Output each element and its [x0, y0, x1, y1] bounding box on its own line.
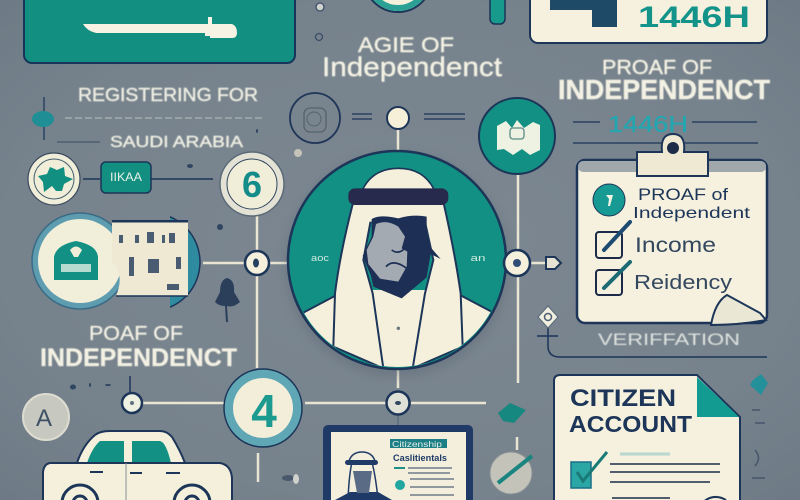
icon: teal circle: [593, 184, 625, 216]
icon: number four badge: [224, 369, 302, 447]
label: verification: VERIFFATION: [598, 330, 740, 349]
building: [112, 220, 188, 296]
node: [504, 250, 530, 276]
heading: registering for Saudi Arabia: SAUDI ARABIA: [110, 134, 243, 151]
icon: teal emblem circle: [479, 98, 555, 174]
icon: letter A badge: A: [36, 405, 52, 432]
side marks: [752, 410, 765, 478]
node: [387, 107, 409, 129]
checklist item: residency: Reidency: [634, 272, 732, 294]
face: [363, 216, 441, 298]
title: ACCOUNT: [569, 411, 692, 437]
icon: teal pin: [32, 97, 54, 140]
panel: top right date card: [530, 0, 767, 43]
node: [386, 392, 410, 414]
title: CITIZEN: [570, 385, 676, 412]
heading: poaf of independenct left: [40, 323, 237, 372]
icon: teal gem lower: [498, 403, 526, 423]
title: [569, 385, 692, 437]
clipboard title: [633, 185, 751, 222]
head top: [363, 168, 434, 189]
icon: number six badge: [220, 152, 284, 216]
icon: number six badge: 6: [242, 164, 262, 205]
node: [245, 251, 269, 275]
top circle: [364, 0, 432, 12]
teal house: [54, 241, 98, 280]
panel: clipboard checklist: [577, 134, 767, 325]
info lines: [394, 468, 454, 495]
icon: bell: [215, 278, 240, 322]
panel: flag: [24, 0, 295, 63]
small text marks: an: [470, 253, 486, 263]
icon: sword: [83, 17, 237, 38]
chest: [370, 290, 427, 373]
node: [546, 257, 561, 269]
heading: age of independence: Independenct: [322, 52, 503, 82]
heading: age of independence: [322, 34, 503, 82]
heading: proaf of independenct right: INDEPENDENCT: [558, 74, 770, 105]
icon: building and house badge: [32, 213, 200, 311]
panel: tablet profile: [323, 425, 473, 500]
shoulders: [303, 294, 492, 349]
teal label 1446H: 1446H: [608, 111, 688, 137]
teal pill: [490, 0, 505, 24]
clipboard title: PROAF of: [638, 185, 728, 204]
figure: [303, 168, 493, 373]
fold: [697, 377, 739, 417]
icon: letter A badge: [23, 394, 69, 440]
icon: star badge: [28, 153, 80, 205]
headband: [348, 188, 448, 205]
node: [122, 376, 142, 413]
icon: car: [43, 431, 232, 500]
icon: check circle: [490, 452, 532, 494]
header bar: [390, 439, 447, 449]
heading: proaf of independenct right: [558, 57, 770, 105]
small top nodes: [316, 3, 324, 40]
icon: diamond node: [538, 306, 558, 328]
checklist item: income: [596, 222, 716, 258]
connector lines: [57, 114, 767, 482]
heading: poaf of independenct left: POAF OF: [89, 323, 183, 345]
label: teal tag: IIKAA: [110, 170, 142, 184]
clipboard title: Independent: [633, 205, 751, 222]
small text marks: [311, 253, 486, 263]
icon: number four: [550, 0, 617, 27]
checklist item: income: Income: [635, 234, 716, 257]
panel: central portrait: [285, 151, 509, 377]
clip: [637, 134, 708, 176]
heading: age of independence: AGIE OF: [358, 34, 454, 57]
checklist item: residency: [596, 262, 732, 295]
profile name: Caslitientals: [393, 453, 447, 463]
headdress: [333, 202, 383, 368]
heading: poaf of independenct left: INDEPENDENCT: [40, 344, 237, 372]
heading: proaf of independenct right: PROAF OF: [602, 57, 712, 79]
icon: teal gem right: [750, 374, 768, 395]
page curl: [711, 295, 766, 325]
date text: 1446H: [638, 1, 750, 34]
small text marks: aoc: [311, 253, 330, 263]
label: teal tag: [101, 162, 151, 193]
icon: outlined clock circle: [290, 93, 340, 143]
heading: registering for Saudi Arabia: REGISTERING FOR: [78, 85, 258, 105]
heading: registering for Saudi Arabia: [78, 85, 258, 151]
icon: number four badge: 4: [251, 385, 277, 437]
small marks: [70, 129, 302, 484]
check box: [571, 452, 607, 488]
mini portrait: [335, 452, 392, 500]
text lines: [610, 454, 720, 498]
header bar: Citizenship: [392, 440, 443, 449]
panel: citizen account document: [554, 375, 740, 500]
